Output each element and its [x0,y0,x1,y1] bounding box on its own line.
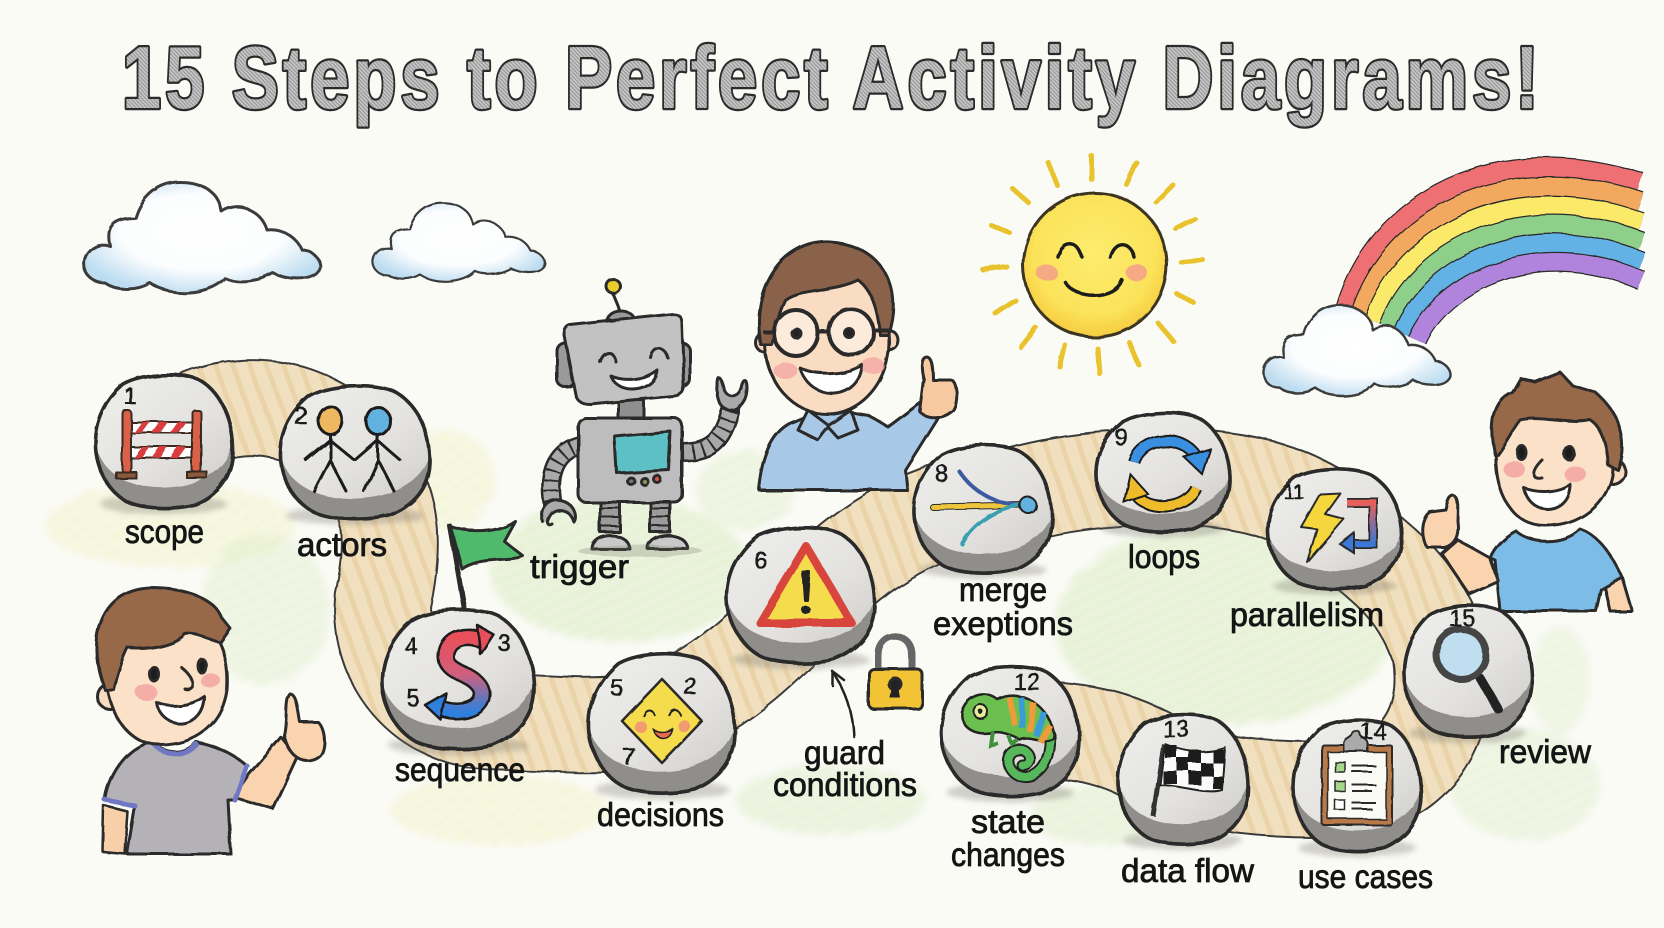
right boy [1422,372,1632,611]
step 13: data flow stone [1118,715,1248,850]
icon: fork bracket arrow [1340,502,1373,553]
grass patches [45,430,1600,845]
label: scope: scope [125,513,204,550]
man head [756,242,898,414]
boy right arm [1604,577,1632,611]
number 8: 8 [935,461,949,488]
trigger flag [450,521,523,607]
robot right arm [682,377,747,452]
title: 15 Steps to Perfect Activity Diagrams! [122,28,1543,127]
label: loops: loops [1128,538,1200,575]
icon: lightning bolt [1301,493,1344,562]
winding path [164,408,1442,789]
man with glasses [756,242,956,490]
label: guard conditions [773,734,917,803]
boy shirt trim [105,744,247,806]
numbers 5 2 7: 2 [683,673,697,700]
icon: loop arrows [1124,441,1210,506]
step 12: state changes stone [941,667,1079,802]
label: sequence: sequence [395,751,525,788]
step 3-4: sequence stone [382,610,534,755]
rainbow cloud [1263,305,1450,396]
icon: merge lines [933,471,1036,544]
step 14: use cases stone [1293,718,1421,857]
step 2: actors stone [280,386,430,525]
numbers 4 3 5 [404,630,511,712]
boy left arm [103,806,128,854]
robot [542,279,747,557]
label: merge exeptions [933,571,1073,642]
boy head [1492,372,1625,526]
label: state changes [951,803,1065,873]
cloud 2 [372,203,545,282]
label: trigger: trigger [530,548,629,585]
step 6: warning stone [727,528,875,669]
number 12: 12 [1014,669,1040,696]
icon: magnifying glass [1436,629,1498,709]
robot body [578,400,682,502]
label: merge exeptions: merge [959,571,1047,608]
label: decisions: decisions [597,796,724,833]
label: state changes: state [971,803,1045,840]
icon: S arrow [425,625,493,720]
numbers 4 3 5: 4 [404,633,418,660]
boy head [96,588,230,745]
padlock [869,636,922,709]
man hand [920,357,956,417]
number 9: 9 [1114,424,1128,451]
numbers 5 2 7: 5 [610,675,624,702]
icon: warning triangle [760,546,852,623]
numbers 4 3 5: 3 [497,630,511,657]
guard arrow [833,672,854,737]
icon: clipboard checklist [1322,731,1392,825]
label: guard conditions: conditions [773,766,917,803]
cloud 1 [84,182,320,293]
icon: checkered flag [1153,744,1225,816]
icon: chameleon [962,695,1054,777]
step 1: scope stone [95,375,233,514]
icon: smiling diamond [622,679,702,763]
number 1: 1 [123,383,137,410]
robot left arm [542,445,582,525]
robot antenna [606,279,635,320]
boy arm and hand [1442,540,1498,594]
label: actors: actors [297,526,387,563]
boy arm and hand [233,737,297,809]
number 14: 14 [1360,718,1386,745]
label: use cases: use cases [1298,858,1433,895]
icon: barrier [116,410,207,478]
step 11: parallelism stone [1268,469,1402,594]
rainbow [1346,167,1641,340]
number 11: 11 [1284,482,1304,504]
numbers 5 2 7 [610,673,697,771]
number 6: 6 [753,547,767,574]
step 8: merge stone [914,446,1052,579]
illustration layer [45,156,1641,857]
label: parallelism: parallelism [1230,596,1384,633]
step 9: loops stone [1096,412,1230,537]
label: guard conditions: guard [804,734,885,771]
label: data flow: data flow [1121,852,1254,889]
man shirt [759,403,937,490]
label: review: review [1499,733,1591,770]
numbers 5 2 7: 7 [622,744,636,771]
label: merge exeptions: exeptions [933,605,1073,642]
robot head [557,314,690,404]
numbers 4 3 5: 5 [406,685,420,712]
step 5: decisions stone [589,654,735,799]
step 15: review stone [1404,605,1532,743]
number 13: 13 [1163,716,1189,743]
icon: two actors [306,406,400,491]
boy shirt [105,742,247,854]
number 15: 15 [1449,605,1475,632]
label: state changes: changes [951,836,1065,873]
robot legs and feet [578,498,702,557]
number 2: 2 [294,403,308,430]
boy shirt [1490,529,1622,611]
sun [983,156,1203,373]
left boy [96,588,324,854]
